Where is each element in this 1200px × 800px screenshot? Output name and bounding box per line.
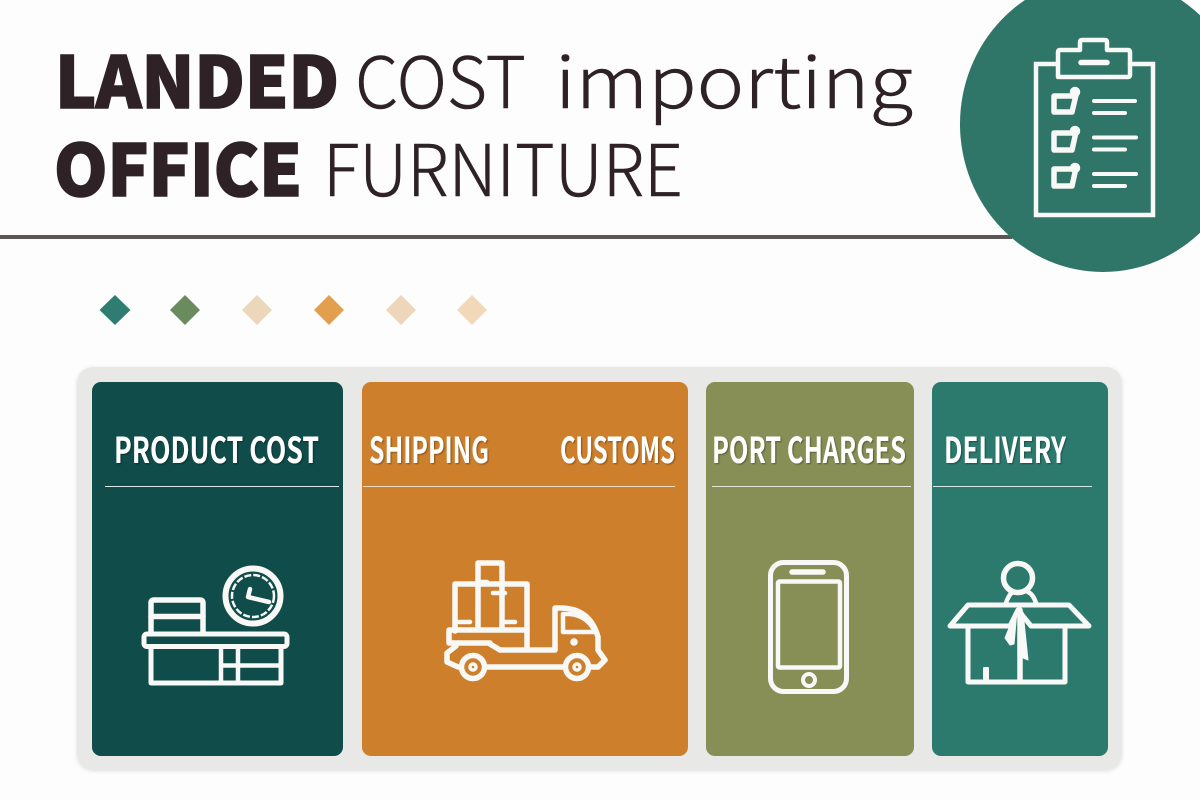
header badge circle with clipboard icon	[960, 0, 1200, 272]
panel: product cost	[92, 382, 343, 756]
diamond palette row	[100, 295, 487, 325]
title	[54, 27, 913, 217]
icon: open box	[950, 564, 1089, 682]
heading: port charges: PORT CHARGES	[712, 422, 906, 474]
title: FURNITURE	[323, 115, 683, 217]
title: LANDED	[55, 27, 339, 129]
icon: clipboard	[1036, 40, 1153, 215]
heading: product cost: PRODUCT COST	[114, 422, 319, 474]
heading: shipping: SHIPPING	[369, 422, 489, 474]
title: importing	[555, 27, 913, 129]
icon: truck with boxes	[447, 563, 605, 678]
title: OFFICE	[54, 115, 302, 217]
header rule	[0, 235, 1012, 239]
panel: delivery	[932, 382, 1108, 756]
heading: customs: CUSTOMS	[560, 422, 675, 474]
panel: frame	[77, 367, 1122, 770]
title: COST	[355, 27, 526, 129]
panel: port charges	[706, 382, 914, 756]
icon: smartphone	[770, 562, 846, 692]
panel: shipping and customs	[362, 382, 688, 756]
icon: desk and clock	[144, 568, 287, 683]
heading: delivery: DELIVERY	[944, 422, 1067, 474]
